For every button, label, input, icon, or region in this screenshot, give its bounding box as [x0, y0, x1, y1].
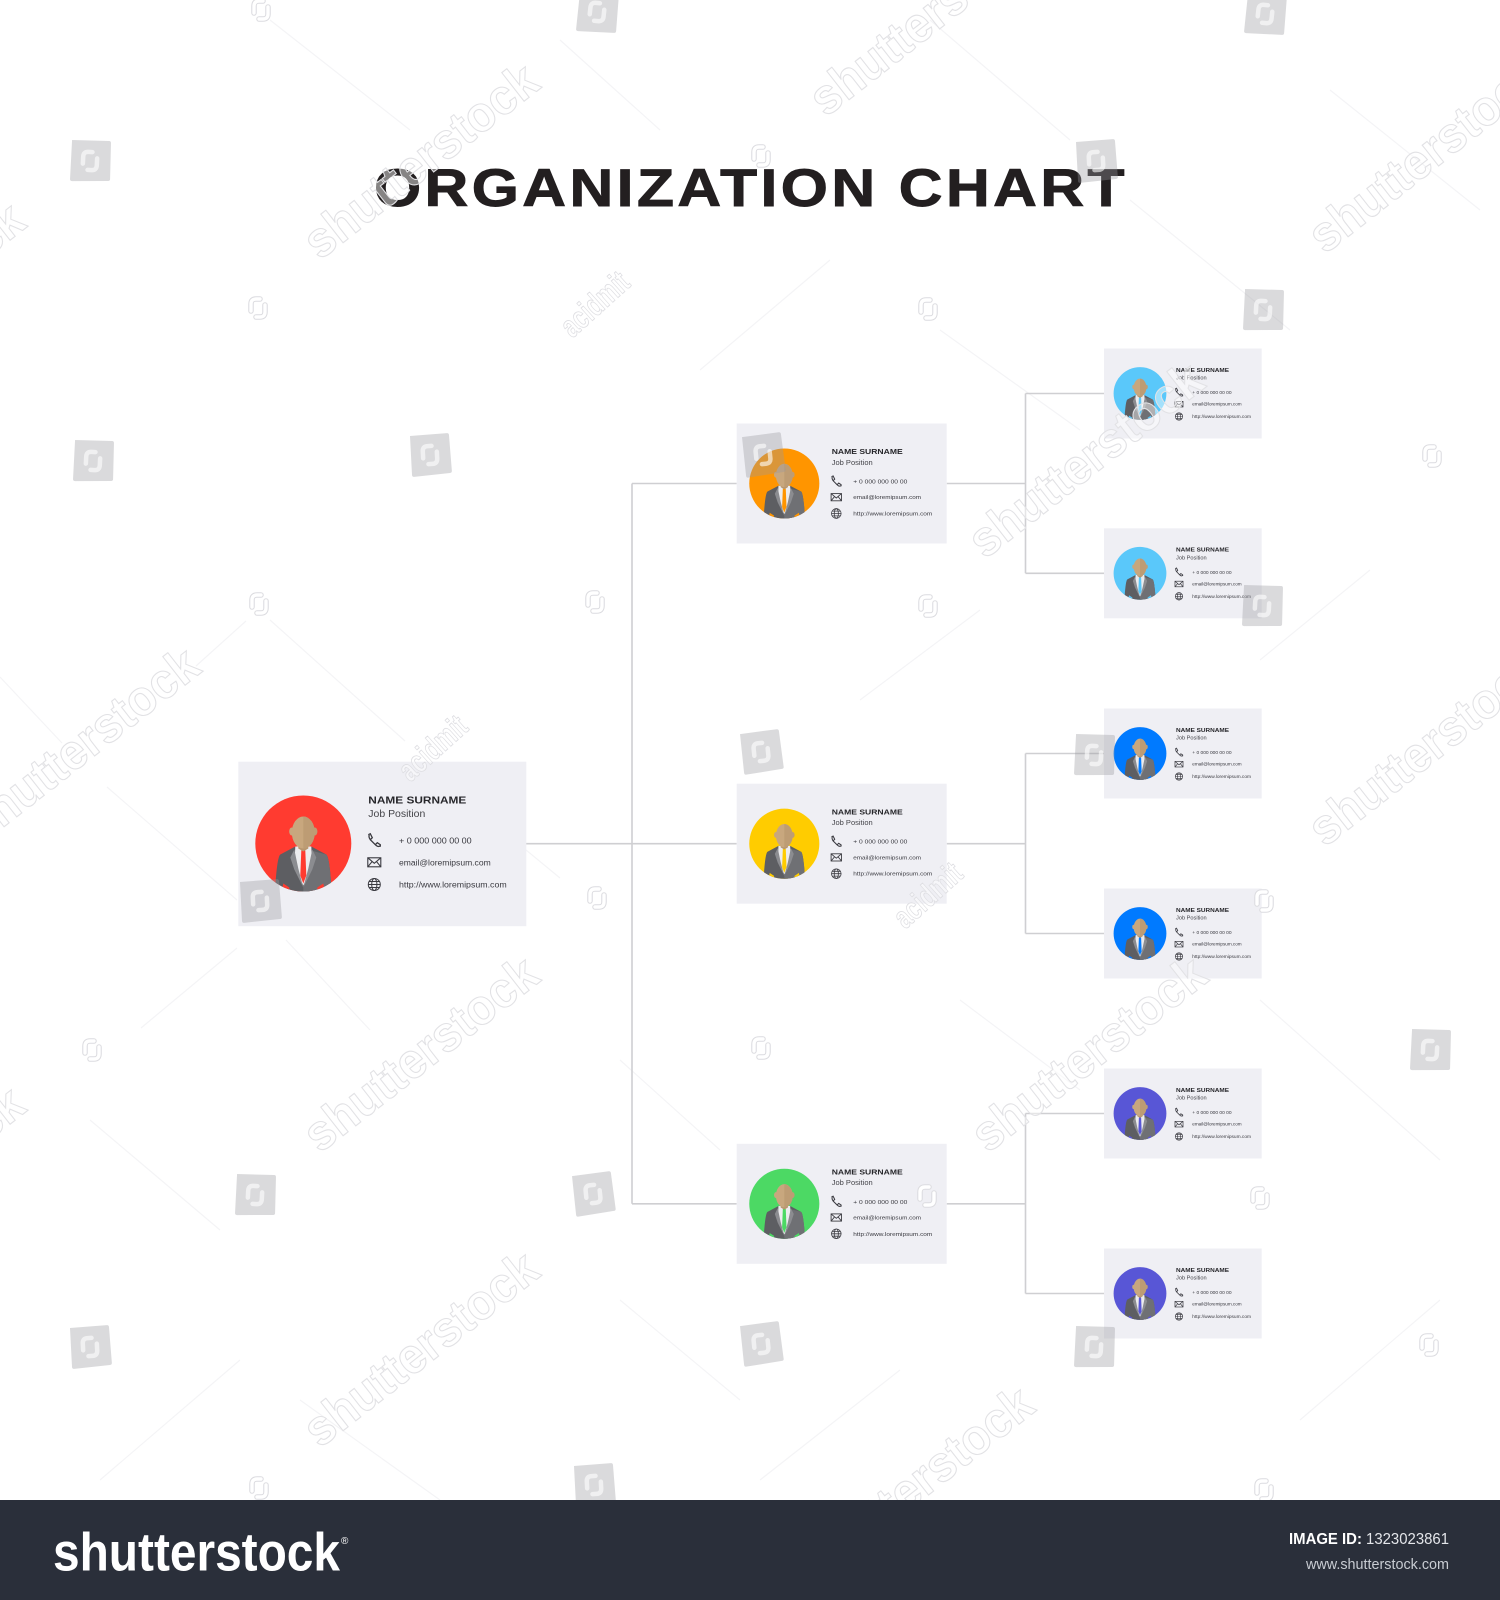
watermark: acidmit outlined text: acidmit [553, 264, 637, 344]
card: small light blue 2 [1104, 528, 1262, 618]
website: http://www.loremipsum.com [1192, 594, 1251, 599]
icon: phone [368, 834, 380, 847]
watermark: shutterstock outlined text: shutterstock [292, 945, 549, 1162]
watermark: shutterstock outlined text: shutterstock [787, 1375, 1044, 1592]
icon: web [1175, 1133, 1183, 1140]
email: email@loremipsum.com [853, 495, 921, 501]
job position: Job Position [1176, 736, 1207, 742]
avatar: blue [1114, 907, 1166, 961]
icon: email [368, 858, 381, 867]
email: email@loremipsum.com [1192, 402, 1242, 407]
phone: + 0 000 000 00 00 [1192, 750, 1232, 755]
icon: web [1175, 593, 1183, 600]
email: email@loremipsum.com [1192, 1122, 1242, 1127]
avatar: orange [749, 448, 819, 520]
name: NAME SURNAME [1176, 368, 1229, 374]
phone: + 0 000 000 00 00 [399, 837, 472, 846]
icon: phone [1175, 1108, 1183, 1116]
registered mark: ® [341, 1536, 349, 1547]
website: http://www.loremipsum.com [853, 872, 932, 878]
email: email@loremipsum.com [1192, 942, 1242, 947]
card: small blue 1 [1104, 708, 1262, 798]
email: email@loremipsum.com [1192, 1302, 1242, 1307]
website: http://www.loremipsum.com [1192, 774, 1251, 779]
name: NAME SURNAME [368, 794, 466, 806]
icon: phone [1175, 928, 1183, 936]
phone: + 0 000 000 00 00 [853, 840, 907, 846]
card: small light blue 1 [1104, 348, 1262, 438]
avatar: purple [1114, 1087, 1166, 1141]
icon: web [832, 1229, 841, 1239]
email: email@loremipsum.com [1192, 581, 1242, 586]
avatar: light blue [1114, 367, 1166, 421]
icon: email [831, 854, 842, 861]
name: NAME SURNAME [1176, 1088, 1229, 1094]
job position: Job Position [832, 458, 873, 467]
icon: phone [1175, 748, 1183, 756]
avatar: red [255, 796, 351, 894]
avatar: blue [1114, 727, 1166, 781]
icon: phone [1175, 1288, 1183, 1296]
name: NAME SURNAME [1176, 728, 1229, 734]
phone: + 0 000 000 00 00 [853, 480, 907, 486]
watermark: acidmit outlined text: acidmit [391, 708, 475, 788]
title: ORGANIZATION CHART [374, 159, 1128, 218]
phone: + 0 000 000 00 00 [1192, 1290, 1232, 1295]
icon: phone [1175, 568, 1183, 576]
card: small purple 1 [1104, 1068, 1262, 1158]
shutterstock logo: shutterstock [53, 1522, 341, 1582]
name: NAME SURNAME [832, 1168, 903, 1177]
website: http://www.loremipsum.com [1192, 414, 1251, 419]
name: NAME SURNAME [1176, 1268, 1229, 1274]
icon: web [832, 509, 841, 518]
website: http://www.loremipsum.com [1192, 1134, 1251, 1139]
watermark: shutterstock outlined text: shutterstock [957, 351, 1214, 568]
icon: email [1175, 1301, 1183, 1307]
watermark: shutterstock outlined text: shutterstock [960, 945, 1217, 1162]
icon: web [1175, 953, 1183, 960]
phone: + 0 000 000 00 00 [1192, 930, 1232, 935]
website: http://www.loremipsum.com [853, 512, 932, 518]
icon: web [1175, 413, 1183, 420]
website: http://www.loremipsum.com [1192, 954, 1251, 959]
watermark: shutterstock outlined text: shutterstock [292, 52, 549, 269]
website: http://www.loremipsum.com [399, 881, 507, 890]
card: mid level orange [737, 424, 947, 544]
icon: phone [1175, 388, 1183, 396]
job position: Job Position [1176, 555, 1207, 561]
avatar: green [749, 1169, 819, 1240]
website: http://www.loremipsum.com [853, 1232, 932, 1238]
avatar: yellow [749, 809, 819, 880]
icon: phone [832, 476, 841, 486]
phone: + 0 000 000 00 00 [1192, 390, 1232, 395]
email: email@loremipsum.com [399, 858, 491, 867]
card: mid level yellow [737, 784, 947, 904]
name: NAME SURNAME [1176, 908, 1229, 914]
icon: phone [832, 1196, 841, 1207]
image id: IMAGE ID: 1323023861 [1289, 1531, 1449, 1548]
phone: + 0 000 000 00 00 [853, 1200, 907, 1206]
card: small purple 2 [1104, 1248, 1262, 1338]
watermark: acidmit outlined text: acidmit [886, 855, 970, 935]
avatar: light blue [1114, 547, 1166, 601]
icon: email [831, 494, 842, 501]
email: email@loremipsum.com [1192, 762, 1242, 767]
icon: web [1175, 1313, 1183, 1320]
watermark: shutterstock outlined text: shutterstock [292, 1240, 549, 1457]
website: www.shutterstock.com [1305, 1556, 1449, 1573]
job position: Job Position [832, 818, 873, 827]
job position: Job Position [832, 1178, 873, 1187]
job position: Job Position [1176, 376, 1207, 382]
phone: + 0 000 000 00 00 [1192, 570, 1232, 575]
website: http://www.loremipsum.com [1192, 1314, 1251, 1319]
job position: Job Position [1176, 1096, 1207, 1102]
icon: email [1175, 581, 1183, 587]
icon: phone [832, 836, 841, 846]
icon: web [368, 878, 380, 890]
card: small blue 2 [1104, 888, 1262, 978]
email: email@loremipsum.com [853, 1216, 921, 1222]
card: top level red [238, 762, 526, 926]
icon: web [1175, 773, 1183, 780]
name: NAME SURNAME [832, 807, 903, 816]
icon: email [1175, 941, 1183, 947]
job position: Job Position [368, 808, 425, 820]
email: email@loremipsum.com [853, 855, 921, 861]
card: mid level green [737, 1144, 947, 1264]
job position: Job Position [1176, 916, 1207, 922]
footer bar [0, 1500, 1500, 1600]
phone: + 0 000 000 00 00 [1192, 1110, 1232, 1115]
name: NAME SURNAME [1176, 548, 1229, 554]
watermark: acidmit outlined text [391, 264, 970, 935]
icon: email [1175, 401, 1183, 407]
icon: email [831, 1214, 842, 1221]
icon: email [1175, 1121, 1183, 1127]
avatar: purple [1114, 1267, 1166, 1321]
job position: Job Position [1176, 1276, 1207, 1282]
icon: email [1175, 761, 1183, 767]
connector lines [526, 394, 1104, 1294]
name: NAME SURNAME [832, 447, 903, 456]
icon: web [832, 869, 841, 878]
